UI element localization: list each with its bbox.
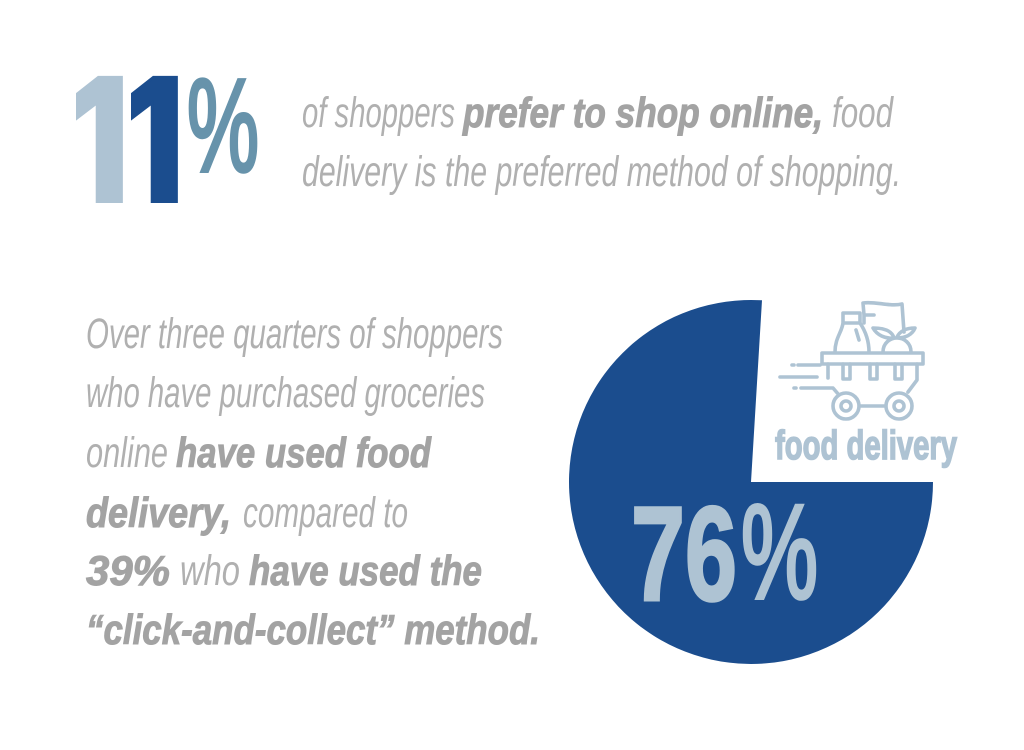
text block: over three quarters: who <box>180 547 240 595</box>
speed lines <box>780 365 839 395</box>
digit: light blue 1: 1 <box>55 31 155 275</box>
icon: food delivery cart <box>780 303 923 419</box>
text block: over three quarters: have used the <box>249 547 482 594</box>
label: food delivery: food delivery <box>775 422 957 468</box>
text block: over three quarters: compared to <box>243 489 408 537</box>
text block: shoppers prefer online <box>302 89 901 196</box>
text block: over three quarters: Over three quarters of shoppers <box>86 310 503 358</box>
stat: 11 percent <box>76 76 258 203</box>
label: 76 percent: 6 <box>685 480 737 629</box>
text block: over three quarters: who have purchased groceries <box>86 369 485 417</box>
label: 76 percent: 7 <box>631 480 685 629</box>
percent sign: % <box>187 52 259 199</box>
bag <box>863 303 904 332</box>
text block: over three quarters <box>86 310 540 653</box>
text block: over three quarters: “click-and-collect” method. <box>86 606 540 653</box>
tray <box>822 353 923 364</box>
text block: over three quarters: have used food <box>176 429 432 476</box>
text block: over three quarters: 39% <box>86 547 170 594</box>
text block: over three quarters: online <box>86 429 168 477</box>
label: 76 percent <box>631 478 818 629</box>
fruit and leaves <box>873 328 915 352</box>
text block: shoppers prefer online: of shoppers <box>302 89 455 137</box>
digit: dark blue 1: 1 <box>110 31 210 275</box>
label: 76 percent: % <box>741 478 818 627</box>
text block: over three quarters: delivery, <box>86 489 231 536</box>
cart body <box>828 364 917 392</box>
text block: shoppers prefer online: food <box>832 89 895 137</box>
bottle <box>835 313 869 352</box>
pie chart: 76 percent <box>569 300 933 664</box>
text block: shoppers prefer online: prefer to shop online, <box>462 89 823 136</box>
wheels <box>833 393 859 419</box>
